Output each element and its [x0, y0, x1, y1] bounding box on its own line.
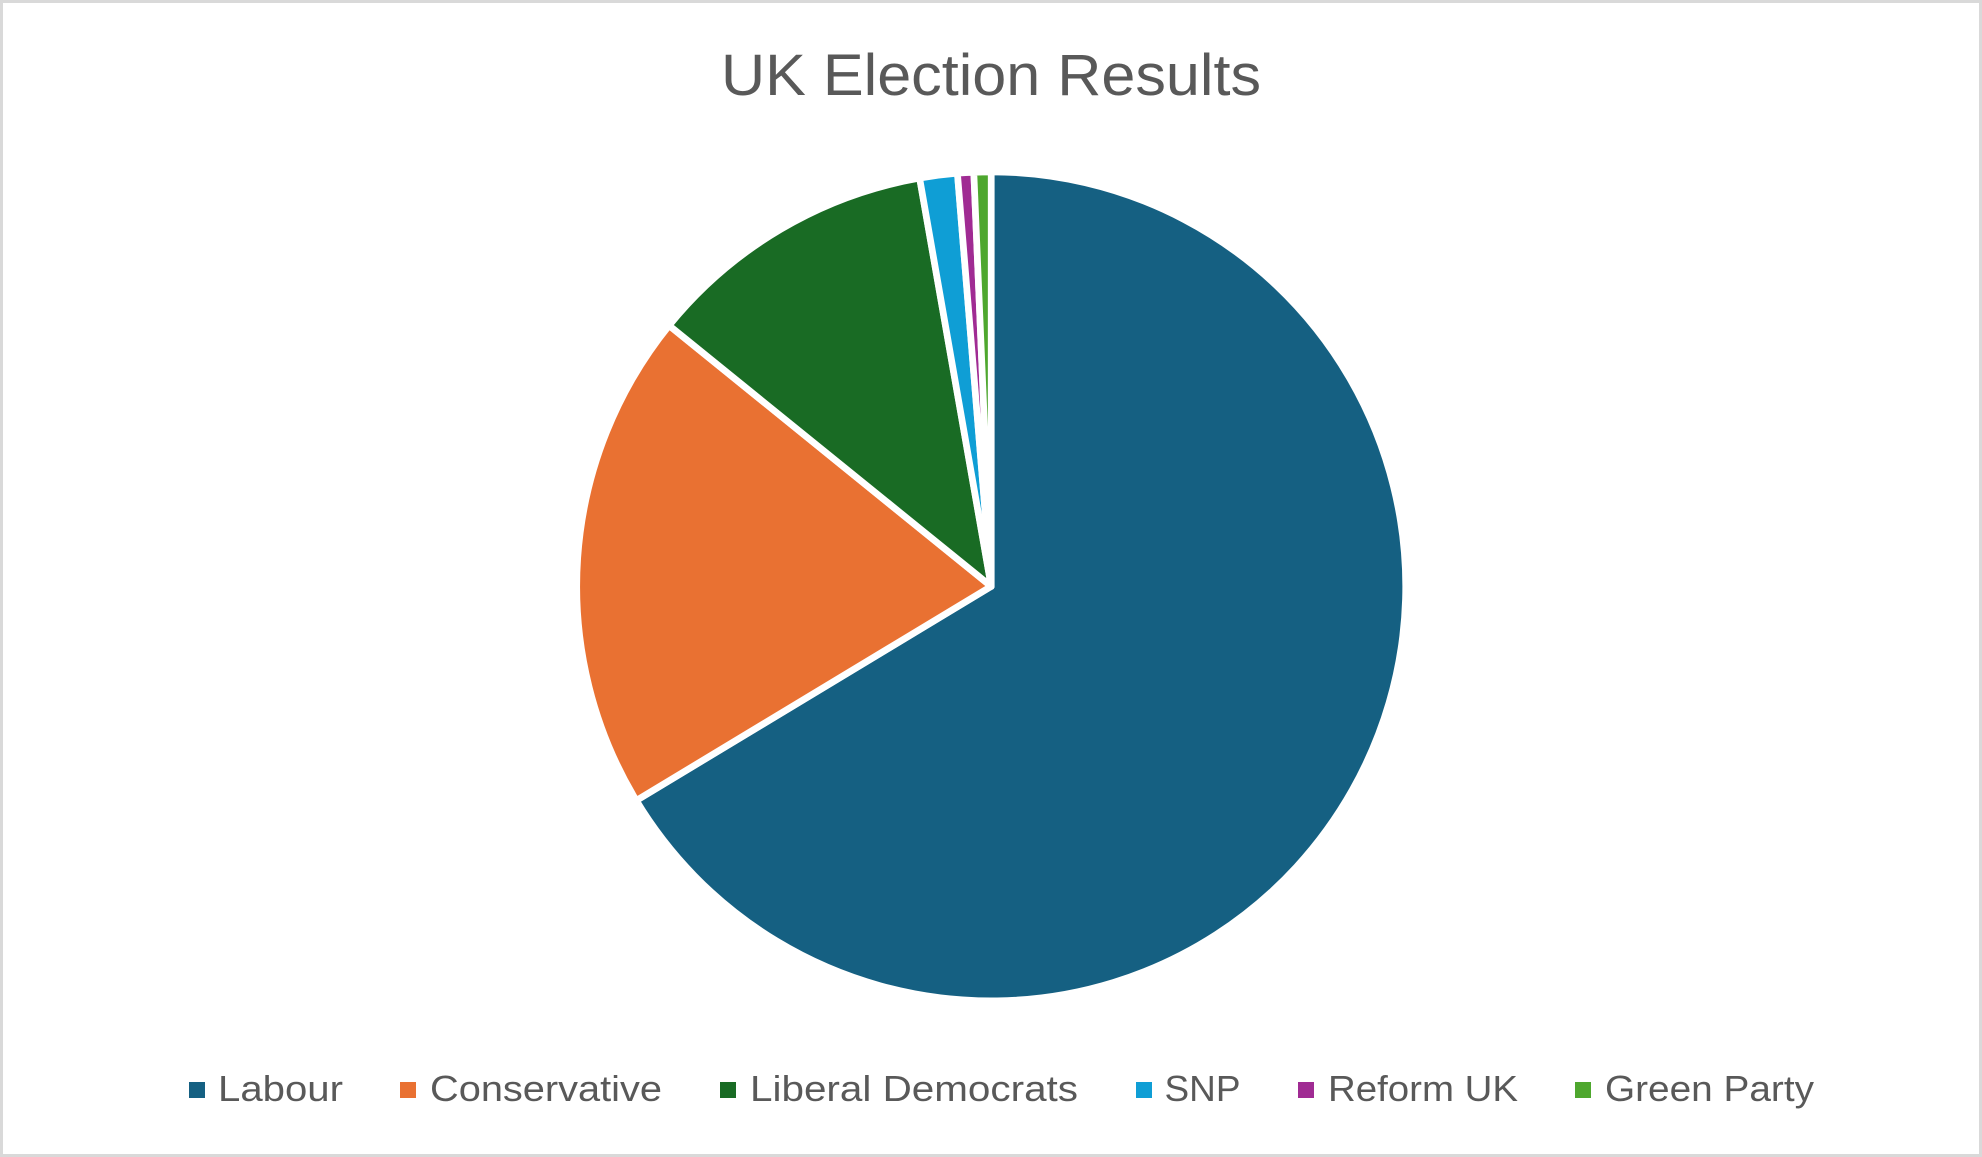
legend item: Conservative: Conservative: [430, 1068, 662, 1109]
legend item: Reform UK: Reform UK: [1328, 1068, 1518, 1109]
title: UK Election Results: [721, 43, 1261, 108]
slice: SNP: [920, 173, 991, 586]
slice: Conservative: [577, 326, 991, 800]
legend item: Labour: Labour: [218, 1068, 343, 1109]
pie chart: [577, 172, 1406, 1001]
slice: Green Party: [974, 172, 991, 586]
slice: Liberal Democrats: [669, 178, 991, 586]
slice: Reform UK: [957, 172, 991, 586]
legend item: Liberal Democrats: Liberal Democrats: [750, 1068, 1078, 1109]
legend: [189, 1068, 1814, 1109]
slice: Labour: [636, 172, 1406, 1001]
legend item: SNP: SNP: [1164, 1068, 1240, 1109]
legend item: Green Party: Green Party: [1605, 1068, 1814, 1109]
